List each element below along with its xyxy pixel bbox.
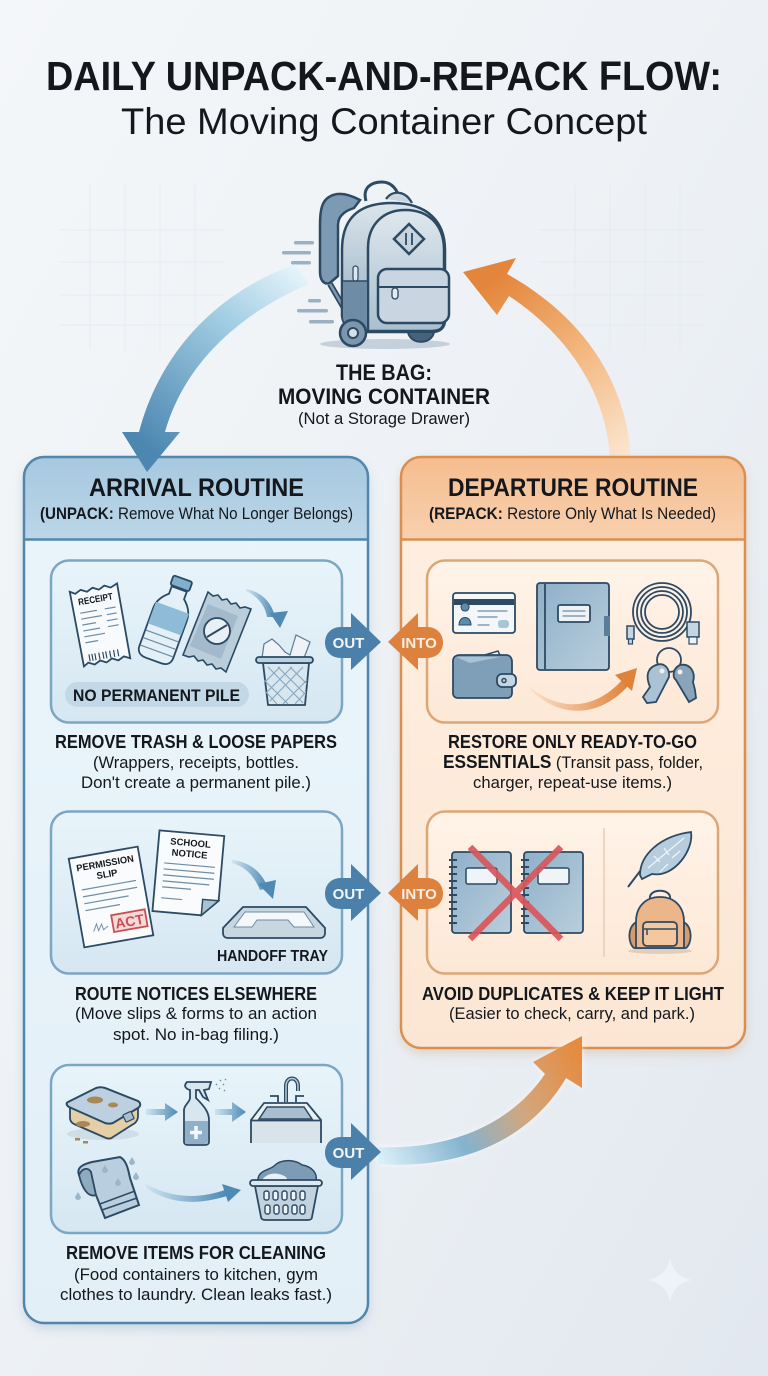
badge: out 2 [325,864,381,921]
icon: transit pass [453,593,515,633]
icon: handoff tray [223,907,325,938]
icon: permission slip [69,847,153,947]
text: route notices: ROUTE NOTICES ELSEWHERE [75,984,317,1004]
arrow: towel to basket [146,1184,241,1202]
icon: food container [67,1087,140,1144]
arrow: to tray [232,860,276,899]
text: remove trash: REMOVE TRASH & LOOSE PAPERS [55,732,337,752]
icon: rolling backpack [282,182,450,349]
text: route notices: (Move slips & forms to an action [75,1004,317,1023]
icon: laundry basket [250,1161,322,1220]
badge: into 1: INTO [401,635,437,652]
text: route notices: spot. No in-bag filing.) [113,1025,279,1044]
badge: into 1 [388,613,443,670]
subheading: unpack: (UNPACK: Remove What No Longer Belongs) [40,505,353,523]
icon: wallet [453,651,516,698]
badge: into 2: INTO [401,886,437,903]
text: restore essentials: ESSENTIALS (Transit pass, folder, [443,752,703,772]
arrow: departure routine to bag [463,258,631,458]
card: remove items for cleaning [51,1065,342,1233]
label: handoff tray: HANDOFF TRAY [217,948,329,965]
text: remove items: REMOVE ITEMS FOR CLEANING [66,1243,326,1263]
icon: receipt [70,583,130,667]
text: remove items: (Food containers to kitchen, gym [74,1265,318,1284]
arrow: container to spray [146,1103,178,1121]
icon: wet towel [75,1157,139,1218]
card: restore essentials [427,560,718,722]
icon: feather [628,832,691,887]
icon: folder [537,583,610,670]
badge: out 1: OUT [333,635,364,652]
text: remove trash [55,732,337,792]
arrow: spray to sink [215,1102,246,1122]
arrow: to trash [246,589,288,628]
heading: departure routine: DEPARTURE ROUTINE [448,474,698,502]
icon: duplicate notebooks crossed out [449,847,583,939]
subheading: repack: (REPACK: Restore Only What Is Needed) [429,505,716,523]
badge: out 2: OUT [333,886,364,903]
title [46,53,722,142]
title: The Moving Container Concept [121,101,648,142]
text: remove trash: (Wrappers, receipts, bottles. [93,753,299,772]
card: route notices [51,812,342,974]
title: DAILY UNPACK-AND-REPACK FLOW: [46,53,722,99]
text: restore essentials: charger, repeat-use items.) [473,773,672,792]
icon: permission slip: SLIP [96,867,119,882]
panel: departure routine [401,457,745,1048]
icon: spray bottle [184,1079,226,1145]
icon: wastebasket [256,635,313,705]
icon: sink [251,1078,321,1143]
bag label: MOVING CONTAINER [278,384,490,409]
bag label: THE BAG: [336,360,432,385]
badge: out 3 [325,1123,381,1180]
icon: snack wrapper [183,592,251,672]
text: avoid duplicates: (Easier to check, carry, and park.) [449,1004,695,1023]
badge: into 2 [388,864,443,921]
text: remove trash: Don't create a permanent pile.) [81,773,311,792]
text: avoid duplicates: AVOID DUPLICATES & KEEP IT LIGHT [422,984,724,1004]
arrow: out to departure panel [378,1036,582,1165]
heading: arrival routine: ARRIVAL ROUTINE [89,474,304,502]
text: route notices [75,984,317,1044]
icon: light backpack [628,891,692,954]
icon: permission slip: PERMISSION [76,854,135,874]
badge: out 3: OUT [333,1145,364,1162]
label: no permanent pile: NO PERMANENT PILE [73,686,240,705]
icon: school notice: SCHOOL [170,836,211,851]
text: remove items: clothes to laundry. Clean leaks fast.) [60,1285,332,1304]
bag label [278,360,490,428]
icon: keys [643,648,696,703]
icon: water bottle [136,572,200,667]
arrow: to keys [530,668,637,711]
icon: permission slip: ACT [114,911,145,932]
card: remove trash [51,560,342,722]
icon: charging cable [627,583,699,644]
arrow: bag to arrival routine [122,264,309,472]
icon: school notice [152,830,224,917]
text: avoid duplicates [422,984,724,1023]
text: restore essentials [443,732,703,792]
card: avoid duplicates [427,812,718,974]
bag label: (Not a Storage Drawer) [298,409,470,428]
icon: receipt: RECEIPT [77,591,114,608]
text: remove items [60,1243,332,1304]
panel: arrival routine [24,457,368,1323]
badge: out 1 [325,613,381,670]
icon: school notice: NOTICE [171,848,208,862]
text: restore essentials: RESTORE ONLY READY-TO-GO [448,732,697,752]
